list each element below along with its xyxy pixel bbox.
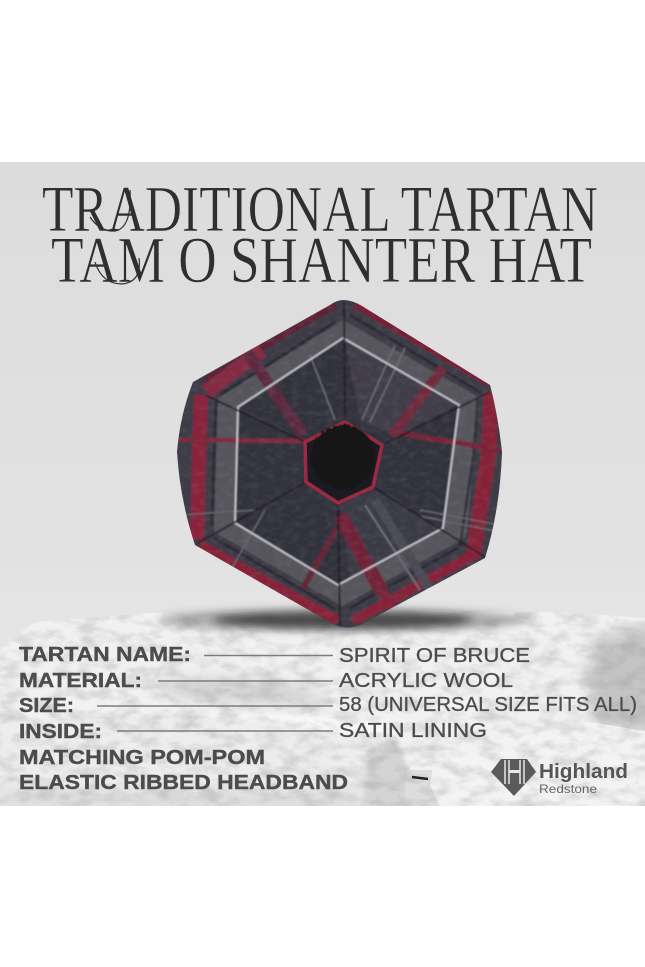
connector lines [97, 656, 333, 731]
feature labels [19, 644, 348, 794]
feature values [339, 645, 637, 742]
title [42, 173, 598, 297]
shadow beneath hat [158, 608, 528, 632]
white hexagon stitching [235, 338, 459, 585]
fabric weave texture [178, 306, 500, 622]
fold lines [198, 302, 490, 626]
feature values: 58 (UNIVERSAL SIZE FITS ALL) [339, 694, 637, 716]
dark plaid lines in ring [212, 315, 480, 609]
feature labels: INSIDE: [19, 721, 102, 743]
grey panels inside hexagon [345, 340, 457, 436]
feature labels: SIZE: [19, 695, 74, 717]
icon: black pom-pom [311, 425, 375, 489]
hat base fabric [170, 295, 510, 635]
feature values: SATIN LINING [339, 720, 487, 742]
logo: Highland Redstone [491, 759, 628, 796]
panel: white rocks [0, 608, 645, 810]
logo: Highland Redstone: Redstone [539, 782, 597, 796]
logo: Highland Redstone: Highland [539, 761, 628, 783]
panel: grey studio background [0, 162, 645, 806]
icon: diamond H mark [491, 759, 536, 796]
feature labels: TARTAN NAME: [19, 644, 191, 666]
hat: tartan tam viewed from above [170, 295, 510, 635]
feature values: SPIRIT OF BRUCE [339, 645, 530, 667]
dark inner hexagon [235, 338, 459, 585]
hat: red centre hexagon [305, 422, 382, 503]
feature values: ACRYLIC WOOL [339, 670, 513, 692]
feature labels: MATERIAL: [19, 670, 142, 692]
feature labels: ELASTIC RIBBED HEADBAND [19, 772, 348, 794]
grey outer plaid ring [214, 320, 480, 606]
feature labels: MATCHING POM-POM [19, 747, 265, 769]
outer red bands [197, 303, 491, 621]
cross stripes [178, 345, 500, 615]
